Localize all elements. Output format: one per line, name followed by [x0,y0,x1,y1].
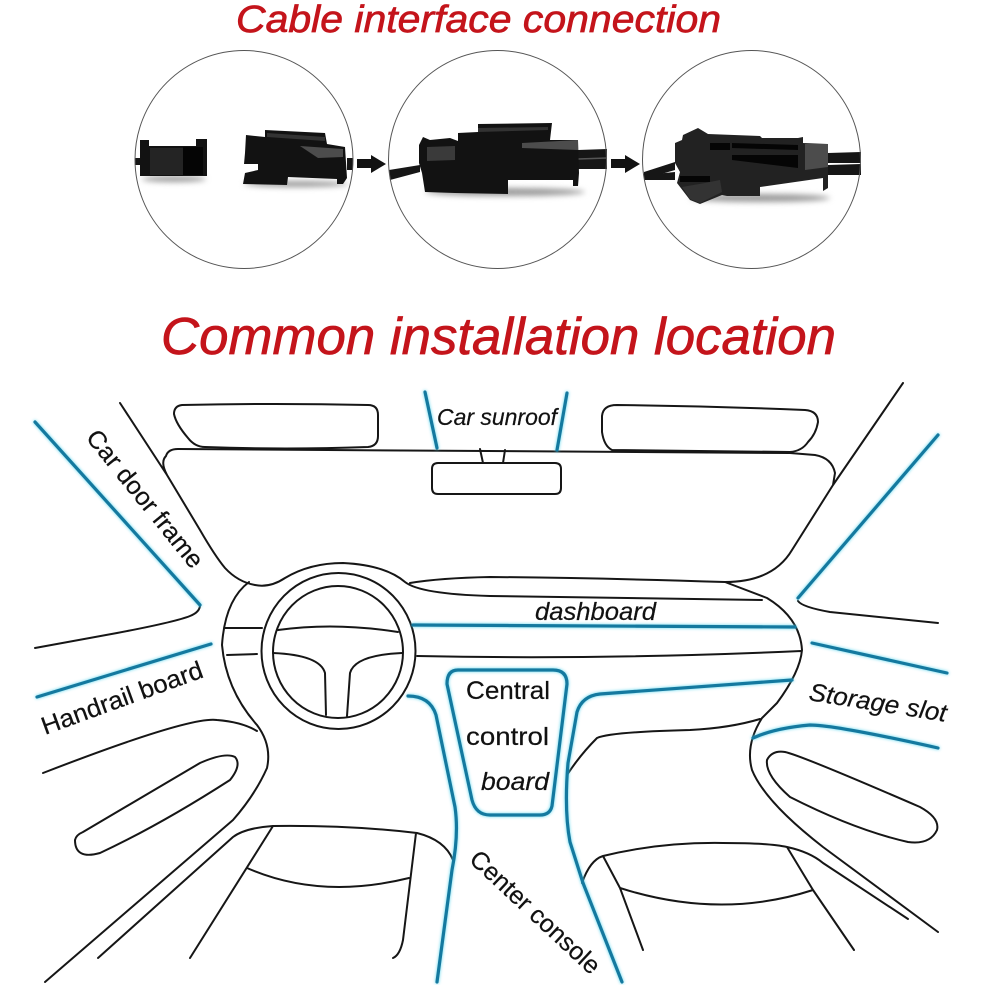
labels: Storage slot [807,678,950,728]
title: cable interface connection: Cable interface connection [236,0,721,41]
labels: control [466,723,549,751]
steering wheel [262,573,416,729]
arrow: second step [611,155,640,173]
labels: Car door frame [80,424,209,574]
circle: connectors joined [388,50,607,268]
labels: dashboard [535,598,657,626]
diagram: car interior [35,383,950,982]
heading: common installation location: Common installation location [161,308,836,366]
circle: separated connectors [135,50,353,268]
labels: Handrail board [37,656,207,741]
blue light strips [35,392,947,982]
sun visors and mirror [174,404,818,494]
labels [37,404,950,980]
right door panel [767,601,938,842]
circle: connector locked [642,50,861,268]
seats and console [98,719,908,958]
labels: Car sunroof [437,404,560,430]
labels: Central [466,677,550,705]
arrow: first step [357,155,386,173]
dashboard [45,582,938,982]
windshield and pillars [120,383,903,600]
labels: Center console [464,845,606,980]
left door panel [35,605,257,855]
labels: board [481,768,550,796]
